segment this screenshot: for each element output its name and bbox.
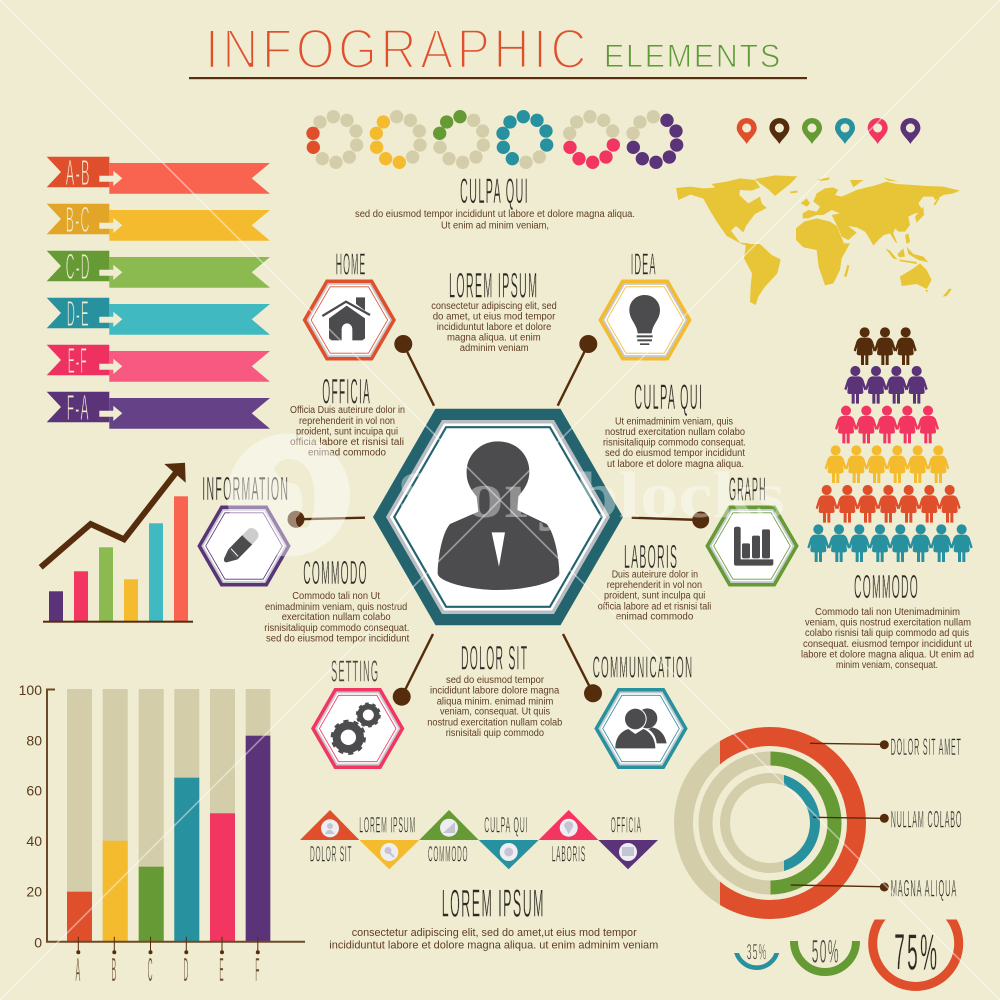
- text block: lorem ipsum middle: consectetur adipiscing elit, sed: [431, 301, 557, 312]
- gauge 35 percent: [734, 944, 780, 970]
- text block: lorem ipsum middle: incididuntut labore et dolore: [437, 322, 552, 333]
- row 5 red: [816, 485, 961, 523]
- triangle labels: CULPA QUI: [484, 813, 528, 838]
- y axis labels: [19, 682, 42, 950]
- text block: dolor sit: aliqua minim. enimad minim: [437, 696, 553, 707]
- icon: bar graph: [734, 527, 773, 566]
- node: setting: [311, 654, 404, 769]
- text block: officia: reprehenderit in vol non: [299, 416, 395, 427]
- triangle labels: [310, 813, 642, 867]
- hexagon idea: [598, 280, 692, 360]
- y axis labels: 60: [26, 782, 42, 798]
- title rule: [189, 77, 807, 79]
- text block: commodo right: colabo risnisi tali quip commodo ad quis: [805, 628, 969, 639]
- y axis labels: 0: [34, 934, 42, 950]
- ribbon D-E: [47, 293, 270, 335]
- ribbon D-E: D-E: [67, 293, 90, 334]
- icon: house: [322, 297, 370, 340]
- hexagon communication: [594, 688, 688, 769]
- y axis labels: 20: [26, 884, 42, 900]
- text block: laboris: [598, 538, 711, 623]
- outer ring: [684, 736, 856, 910]
- x axis labels: [76, 951, 260, 988]
- infographic canvas: INFORMATION: [202, 470, 289, 507]
- text block: laboris: officia labore ad et risnisi tali: [598, 601, 711, 612]
- dot ring 6: [626, 110, 683, 169]
- triangles: [300, 810, 658, 869]
- text block: dolor sit: incididunt labore dolore magna: [430, 686, 560, 697]
- text block: lorem ipsum middle: adminim veniam: [460, 343, 529, 354]
- text block: commodo left: Commodo tali non Ut: [292, 591, 380, 602]
- text block: laboris: proident, sunt inculpa qui: [604, 591, 705, 602]
- text block: culpa qui top: CULPA QUI: [460, 172, 529, 211]
- infographic canvas: LOREM IPSUM: [449, 266, 538, 305]
- x axis labels: D: [184, 951, 189, 988]
- node: information: [197, 470, 291, 586]
- text block: culpa qui right: CULPA QUI: [634, 378, 703, 417]
- pin teal: [835, 118, 855, 144]
- node: idea: IDEA: [631, 246, 657, 281]
- y axis labels: 40: [26, 833, 42, 849]
- text block: dolor sit: veniam, consequat. Ut quis: [440, 707, 550, 718]
- text block: commodo left: [264, 554, 410, 645]
- panel: ribbon labels: [47, 152, 270, 429]
- node: graph: [705, 471, 799, 586]
- gauge 50 percent: [790, 940, 860, 976]
- text block: laboris: reprehenderit in vol non: [607, 580, 702, 591]
- triangle icons: [321, 819, 637, 861]
- text block: officia: proident, sunt incuipa qui: [296, 426, 398, 438]
- dot ring 3: [433, 110, 490, 169]
- chart: concentric rings: [684, 736, 856, 910]
- node: idea: [598, 246, 692, 360]
- icon: light bulb: [629, 295, 660, 345]
- connector lines and dots: [288, 335, 709, 706]
- connector graph: [632, 512, 709, 528]
- panel: triangle strip: [300, 810, 658, 869]
- hexagon information: [197, 506, 291, 586]
- pin green: [802, 118, 822, 144]
- triangle labels: DOLOR SIT: [310, 842, 352, 867]
- x axis labels: B: [112, 951, 117, 988]
- y axis labels: 100: [19, 682, 42, 698]
- text block: commodo right: [801, 568, 974, 671]
- text block: dolor sit: risnisitali quip commodo: [446, 728, 545, 739]
- text block: commodo left: enimadminim veniam, quis nostrud: [265, 602, 407, 613]
- bar tracks: [67, 689, 270, 941]
- middle ring: [706, 758, 834, 888]
- text block: laboris: Duis auteirure dolor in: [612, 569, 698, 580]
- node: communication: [593, 649, 693, 769]
- ribbon B-C: B-C: [66, 199, 91, 240]
- text block: commodo left: risnisitaliquip commodo consequat.: [264, 623, 409, 634]
- gauge 50 percent: 50%: [812, 933, 840, 969]
- connector setting: [393, 634, 433, 706]
- watermark text: Storyblocks: [397, 459, 785, 532]
- ribbon B-C: [47, 199, 270, 241]
- triangle labels: LOREM IPSUM: [359, 813, 416, 838]
- text block: culpa qui right: sed do eiusmod tempor incididunt: [605, 448, 745, 459]
- dot ring 4: [496, 110, 553, 169]
- connector information: [288, 511, 365, 528]
- text block: culpa qui top: [355, 172, 635, 232]
- text block: lorem ipsum middle: do amet, ut eius mod tempor: [433, 311, 556, 322]
- text block: commodo right: Commodo tali non Utenimadminim: [815, 607, 960, 618]
- text block: lorem ipsum bottom: incididuntut labore et dolore magna aliqua. ut enim adminim veniam: [329, 939, 658, 951]
- ribbon E-F: E-F: [68, 340, 88, 381]
- inner ring: [725, 778, 815, 868]
- bar values: [67, 736, 270, 941]
- hexagon graph: [705, 506, 799, 586]
- pin pink: [868, 118, 888, 144]
- text block: officia: [290, 372, 405, 458]
- panel: dot rings: [306, 110, 683, 169]
- dot ring 1: [306, 110, 363, 169]
- title: [189, 17, 807, 80]
- title word: elements: ELEMENTS: [604, 38, 782, 74]
- triangle labels: LABORIS: [552, 842, 586, 867]
- ring callouts: [791, 734, 962, 903]
- ribbon F-A: F-A: [67, 387, 90, 428]
- callout dolor sit amet: [810, 734, 962, 761]
- node: graph: GRAPH: [729, 471, 767, 508]
- text block: culpa qui right: Ut enimadminim veniam, quis: [615, 416, 733, 428]
- pin purple: [900, 118, 920, 144]
- people pyramid: [807, 327, 973, 562]
- text block: dolor sit: [427, 639, 563, 739]
- text block: dolor sit: sed do eiusmod tempor: [446, 675, 545, 686]
- infographic canvas: SETTING: [331, 654, 379, 689]
- growth baseline: [43, 621, 193, 623]
- pin red: [737, 118, 757, 144]
- dot ring 2: [370, 110, 427, 169]
- growth bars: [49, 496, 188, 622]
- text block: lorem ipsum bottom: LOREM IPSUM: [442, 883, 545, 926]
- icon: pencil: [224, 528, 259, 562]
- connector communication: [563, 634, 602, 702]
- x axis ticks: [76, 937, 260, 954]
- ribbon A-B: [47, 152, 270, 194]
- callout magna aliqua: [791, 876, 957, 903]
- pin brown: [769, 118, 789, 144]
- gauge 75 percent: [873, 900, 959, 986]
- ribbon E-F: [47, 340, 270, 382]
- infographic canvas: DOLOR SIT: [461, 639, 528, 677]
- connector home: [394, 335, 434, 406]
- text block: culpa qui right: nostrud exercitation nullam colabo: [605, 427, 746, 438]
- ribbon C-D: C-D: [66, 246, 91, 287]
- text block: lorem ipsum middle: magna aliqua. ut enim: [447, 332, 541, 343]
- text block: officia: Officia Duis auteirure dolor in: [290, 405, 405, 416]
- infographic canvas: OFFICIA: [322, 372, 371, 411]
- text block: laboris: enimad commodo: [616, 612, 694, 623]
- node: home: HOME: [336, 246, 366, 281]
- triangle labels: COMMODO: [428, 842, 468, 867]
- text block: officia: officia labore et risnisi tali: [290, 437, 404, 448]
- connector idea: [558, 335, 597, 406]
- row 4 yellow: [825, 445, 949, 483]
- text block: culpa qui top: sed do eiusmod tempor incididunt ut labore et dolore magna aliqua.: [355, 209, 635, 220]
- text block: commodo right: consequat. eiusmod tempor incididunt ut: [803, 639, 972, 650]
- icon: business person: [438, 441, 559, 590]
- node: home: [303, 246, 396, 360]
- text block: dolor sit: nostrud exercitation nullam colab: [427, 717, 563, 728]
- ribbon F-A: [47, 387, 270, 429]
- x axis labels: E: [219, 951, 224, 988]
- chart: growth bars with arrow: [41, 463, 193, 623]
- text block: commodo left: COMMODO: [303, 554, 368, 591]
- row 2 purple: [844, 366, 928, 404]
- text block: laboris: LABORIS: [624, 538, 678, 575]
- ribbon C-D: [47, 246, 270, 288]
- text block: commodo right: labore et dolore magna aliqua. Ut enim ad: [801, 650, 974, 660]
- text block: commodo right: veniam, quis nostrud exercitation nullam: [805, 618, 971, 628]
- ribbon A-B: A-B: [66, 152, 91, 193]
- world map: [676, 175, 960, 305]
- x axis labels: C: [148, 951, 153, 988]
- row 6 teal: [807, 524, 973, 562]
- text block: lorem ipsum bottom: consectetur adipiscing elit, sed do amet,ut eius mod tempor: [352, 927, 637, 939]
- infographic canvas: OFFICIA: [611, 813, 642, 838]
- hexagon setting: [311, 688, 404, 769]
- icon: people: [615, 708, 667, 748]
- icon: gears: [332, 704, 380, 754]
- row 3 pink: [835, 406, 939, 443]
- text block: culpa qui top: Ut enim ad minim veniam,: [441, 220, 549, 232]
- central hexagon: [373, 409, 623, 625]
- growth arrow: [41, 463, 186, 567]
- row 1 brown: [854, 327, 917, 365]
- text block: lorem ipsum middle: [431, 266, 557, 354]
- text block: culpa qui right: [603, 378, 746, 470]
- gauge 35 percent: 35%: [747, 939, 767, 964]
- title word: infographic: INFOGRAPHIC: [205, 17, 590, 80]
- chart: stacked bar chart: F: [255, 951, 260, 988]
- callout nullam colabo: [813, 807, 962, 834]
- text block: commodo left: exercitation nullam colabo: [282, 612, 391, 623]
- y axis labels: 80: [26, 732, 42, 748]
- text block: culpa qui right: risnisitaliquip commodo consequat.: [603, 438, 746, 448]
- dot ring 5: [563, 110, 620, 169]
- text block: commodo left: sed do eiusmod tempor incididunt: [266, 634, 410, 645]
- text block: commodo right: minim veniam, consequat.: [836, 660, 938, 671]
- chart axes: [47, 690, 305, 942]
- panel: map pins: [737, 118, 920, 144]
- chart: stacked bar chart: [19, 682, 305, 988]
- text block: lorem ipsum bottom: [329, 883, 658, 951]
- x axis labels: A: [76, 951, 81, 988]
- text block: culpa qui right: ut labore et dolore magna aliqua.: [607, 459, 744, 470]
- infographic canvas: COMMUNICATION: [593, 649, 693, 684]
- watermark circle: [227, 434, 350, 557]
- text block: officia: enimad commodo: [308, 448, 387, 458]
- hexagon home: [303, 280, 396, 360]
